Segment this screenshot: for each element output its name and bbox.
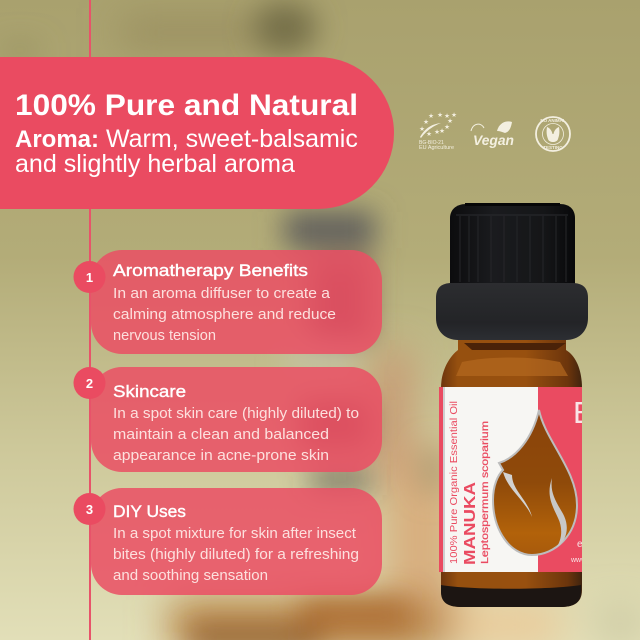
- right label brand text: e: [577, 539, 583, 550]
- icon: EU organic leaf: ★: [419, 125, 425, 133]
- number badge 1: 1: [86, 270, 93, 285]
- title: 100% Pure and Natural: [15, 89, 358, 122]
- icon: EU organic leaf: ★: [437, 111, 443, 119]
- heading: skincare: Skincare: [113, 382, 186, 401]
- icon: EU organic leaf: ★: [447, 117, 453, 125]
- icon: EU organic leaf: ★: [444, 112, 450, 120]
- body text: In a spot mixture for skin after insect: [113, 526, 356, 542]
- body text: [113, 286, 336, 344]
- vertical timeline line: [89, 0, 91, 640]
- number badge 3: 3: [86, 502, 93, 517]
- icon: vegan leaf: [471, 121, 514, 148]
- icon: no animal testing: NO ANIMAL: [540, 118, 566, 123]
- label text: [448, 401, 491, 565]
- right label brand text: E: [573, 395, 594, 430]
- cap ribbed top: [450, 203, 575, 284]
- icon: EU organic leaf: ★: [434, 128, 440, 136]
- icon: no animal testing: TESTING: [543, 145, 563, 150]
- drop logo: [493, 410, 577, 555]
- body text: nervous tension: [113, 328, 216, 344]
- body text: maintain a clean and balanced: [113, 427, 329, 443]
- body text: In a spot skin care (highly diluted) to: [113, 406, 359, 422]
- icon: EU organic leaf: BG-BIO-21: [419, 140, 444, 146]
- icon: EU organic leaf: [419, 111, 457, 151]
- body text: and soothing sensation: [113, 568, 268, 584]
- icon: EU organic leaf: ★: [426, 130, 432, 138]
- icon: EU organic leaf: ★: [451, 111, 457, 119]
- number badge 1: [74, 261, 106, 293]
- icon: EU organic leaf: ★: [444, 123, 450, 131]
- body text: [113, 526, 359, 584]
- label: [439, 387, 594, 572]
- body text: bites (highly diluted) for a refreshing: [113, 547, 359, 563]
- number badge 3: [74, 493, 106, 525]
- icon: EU organic leaf: ★: [428, 112, 434, 120]
- body text: calming atmosphere and reduce: [113, 307, 336, 323]
- icon: EU organic leaf: ★: [439, 127, 445, 135]
- heading: diy uses: DIY Uses: [113, 502, 186, 521]
- body text: [113, 406, 359, 464]
- glass body: [441, 340, 582, 607]
- aroma description: Aroma: Warm, sweet-balsamic: [15, 125, 358, 153]
- icon: EU organic leaf: ★: [423, 118, 429, 126]
- number badge 2: [74, 367, 106, 399]
- label text: Leptospermum scoparium: [479, 421, 491, 564]
- icon: vegan leaf: Vegan: [473, 132, 514, 148]
- heading: aromatherapy benefits: Aromatherapy Benefits: [113, 261, 308, 280]
- card 1: aromatherapy benefits: [74, 250, 382, 354]
- number badge 2: 2: [86, 376, 93, 391]
- cap collar: [436, 283, 588, 340]
- body text: In an aroma diffuser to create a: [113, 286, 331, 302]
- icon: EU organic leaf: EU Agriculture: [419, 145, 454, 151]
- card 2: skincare: [74, 367, 382, 472]
- icon: no animal testing: [536, 117, 570, 151]
- aroma description: [15, 125, 358, 178]
- label text: 100% Pure Organic Essential Oil: [448, 401, 460, 564]
- body text: appearance in acne-prone skin: [113, 448, 329, 464]
- bottle: [436, 203, 594, 607]
- right label brand text: www.: [570, 557, 588, 564]
- card 3: diy uses: [74, 488, 382, 595]
- label text: MANUKA: [462, 481, 479, 565]
- header banner: [0, 57, 394, 209]
- aroma description: and slightly herbal aroma: [15, 150, 295, 178]
- right label brand text: [571, 402, 582, 562]
